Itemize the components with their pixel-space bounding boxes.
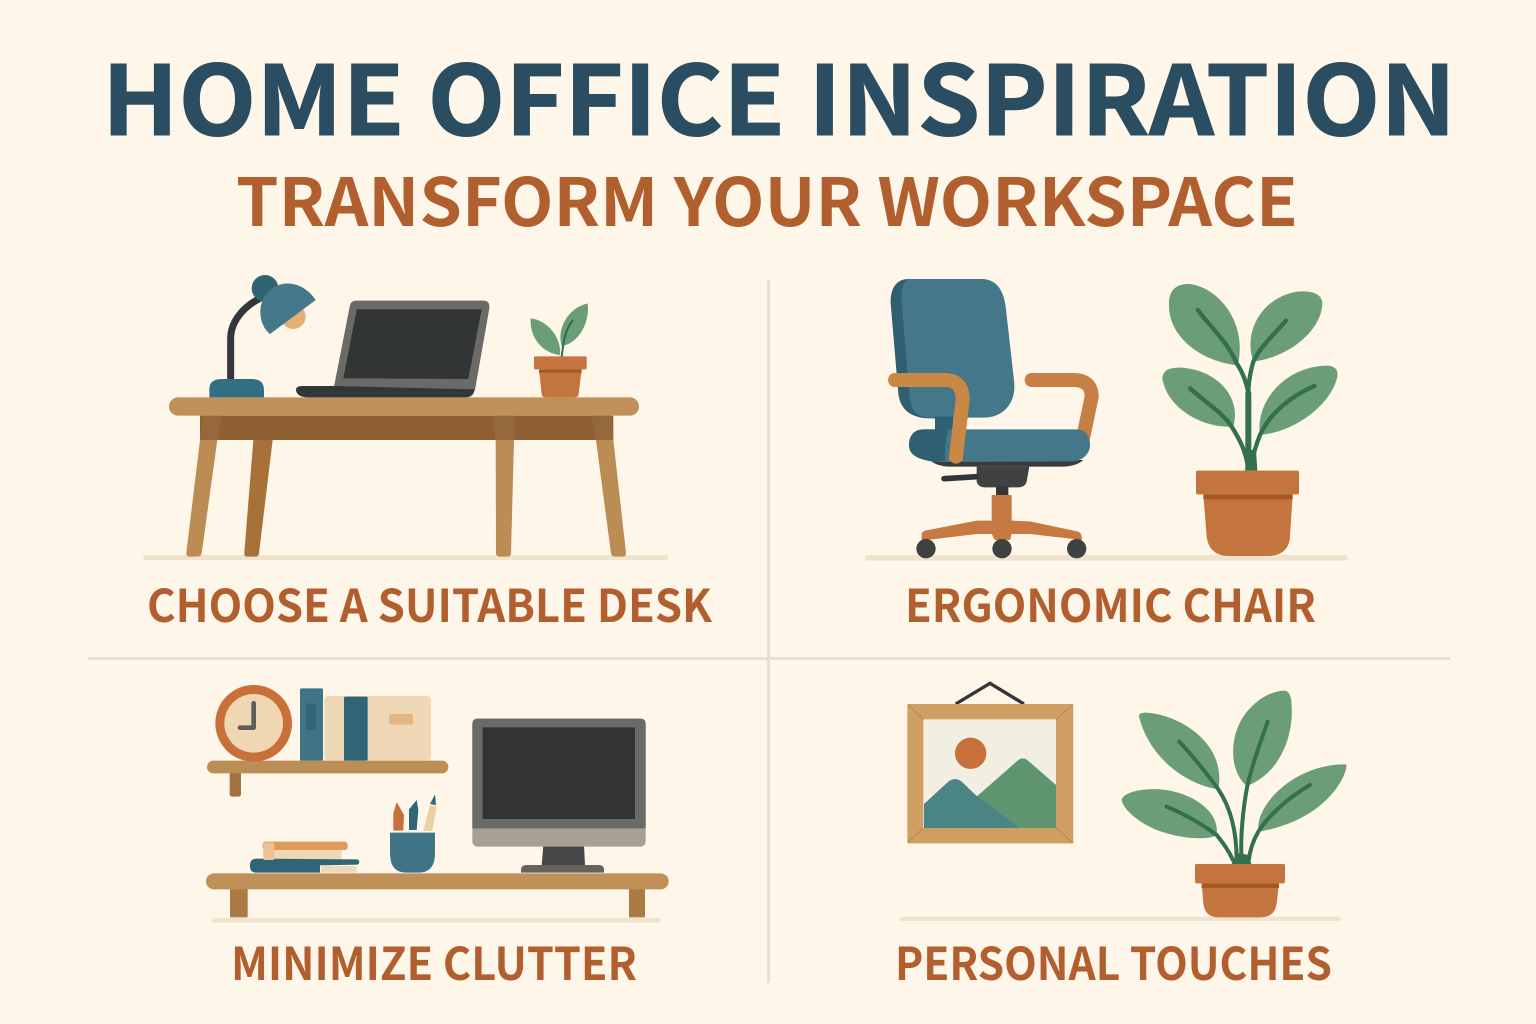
icon: potted plant — [1122, 691, 1346, 917]
icon: small potted plant — [531, 303, 588, 397]
icon: stacked books — [250, 842, 359, 873]
icon: monitor — [472, 719, 646, 873]
label: ERGONOMIC CHAIR — [905, 570, 1316, 635]
icon: large potted plant — [1162, 284, 1338, 556]
icon: clock — [215, 685, 292, 762]
subtitle: TRANSFORM YOUR WORKSPACE — [236, 150, 1298, 246]
label: PERSONAL TOUCHES — [895, 928, 1332, 993]
icon: laptop — [296, 301, 489, 397]
icon: desk — [169, 397, 639, 557]
icon: desk lamp — [209, 275, 316, 397]
label: MINIMIZE CLUTTER — [231, 928, 637, 993]
panel: choose a suitable desk — [143, 275, 713, 635]
icon: picture and plant scene — [900, 683, 1346, 921]
icon: chair and plant scene — [865, 279, 1348, 561]
panel: minimize clutter — [206, 685, 669, 993]
panel: ergonomic chair — [865, 279, 1348, 635]
icon: wall shelf — [207, 761, 448, 797]
icon: lower shelf — [206, 873, 669, 917]
label: CHOOSE A SUITABLE DESK — [147, 570, 713, 635]
icon: desk scene — [143, 275, 668, 560]
title: HOME OFFICE INSPIRATION — [102, 24, 1456, 163]
icon: framed picture — [907, 683, 1073, 843]
icon: books and storage box — [300, 688, 431, 761]
icon: pen cup — [390, 794, 437, 873]
icon: office chair — [891, 279, 1092, 558]
icon: shelves and monitor scene — [206, 685, 669, 923]
panel: personal touches — [895, 683, 1346, 993]
